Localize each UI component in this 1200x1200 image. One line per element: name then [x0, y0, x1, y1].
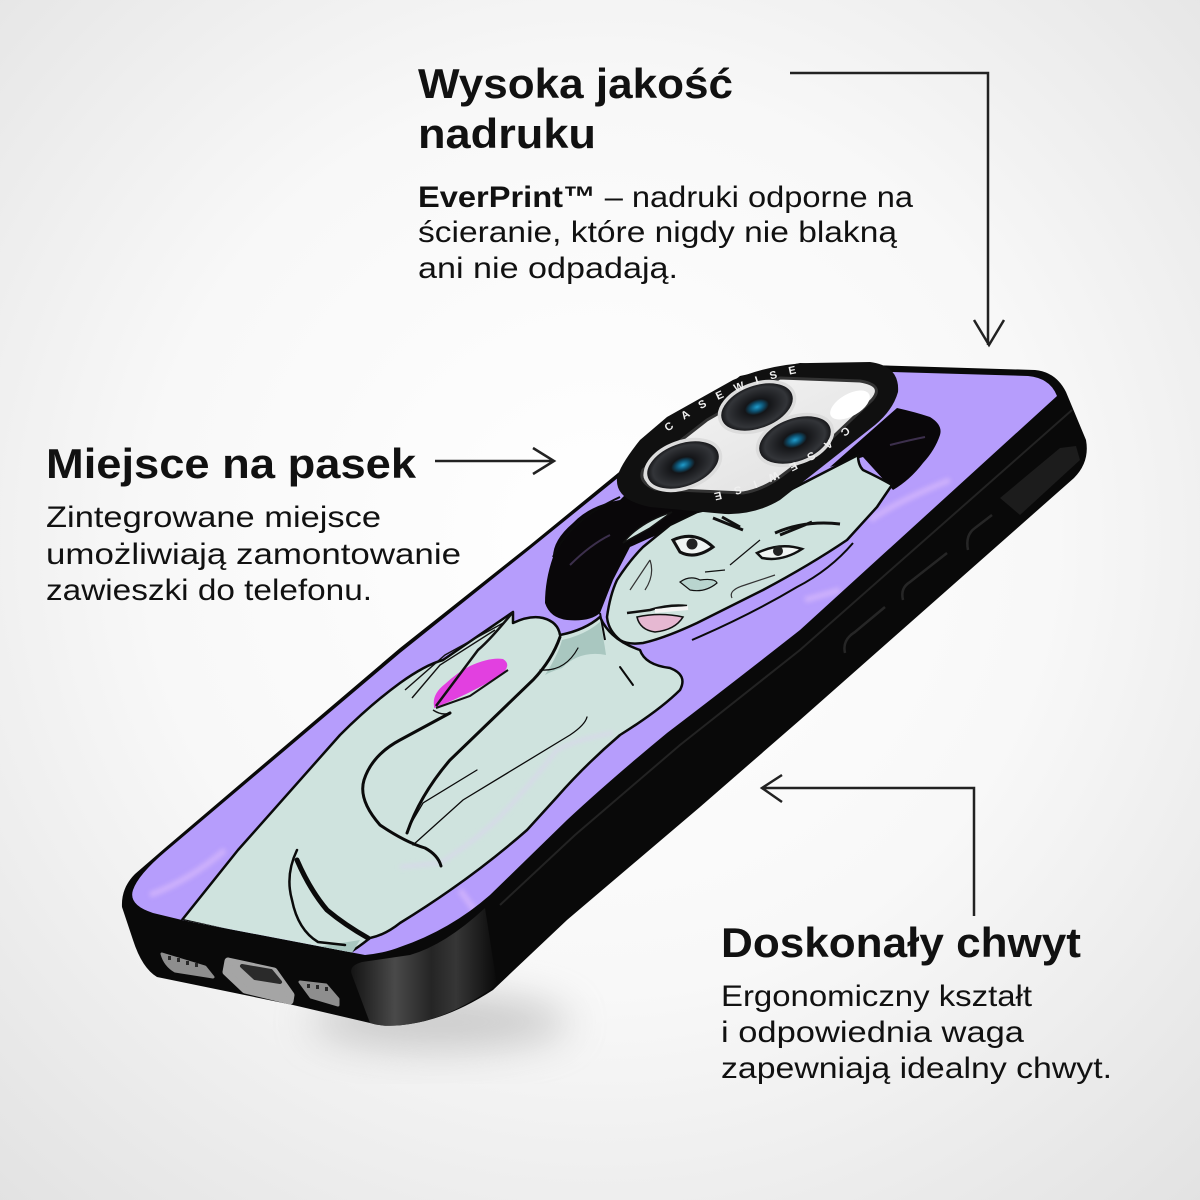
- phone drop shadow: [310, 994, 570, 1050]
- callout: strap slot: [46, 440, 461, 607]
- callout: grip: [721, 919, 1112, 1085]
- brand text on ring: [665, 366, 850, 500]
- ear: [623, 512, 672, 543]
- description: [721, 980, 1112, 1085]
- callout: print quality: [418, 60, 913, 285]
- camera opening: [642, 378, 876, 493]
- eyes: [673, 536, 802, 559]
- mouth: [627, 606, 688, 632]
- side buttons: [844, 515, 992, 653]
- heading: Doskonały chwyt: [721, 919, 1081, 966]
- hair highlights: [570, 437, 925, 565]
- description: [418, 181, 913, 285]
- description: zawieszki do telefonu.: [46, 574, 372, 607]
- neck shadow: [545, 622, 606, 675]
- hand fingers: [405, 612, 513, 714]
- arrow: grip: [762, 775, 974, 916]
- phone in black case: [122, 362, 1087, 1026]
- heading: nadruku: [418, 110, 596, 157]
- arrow: print quality: [790, 73, 1004, 345]
- camera ring: [617, 362, 898, 514]
- arrow: strap slot: [435, 448, 554, 474]
- description: EverPrint™ – nadruki odporne na: [418, 181, 913, 214]
- lenses: [712, 372, 802, 442]
- description: umożliwiają zamontowanie: [46, 538, 461, 571]
- glossy corner highlight: [351, 908, 497, 1026]
- side rim details: [500, 410, 1080, 905]
- highlight: [825, 384, 875, 426]
- figure body: [182, 612, 682, 955]
- hair: [545, 496, 696, 620]
- light streaks: [150, 480, 950, 915]
- arm and torso lines: [289, 637, 633, 945]
- heading: Wysoka jakość: [418, 60, 733, 107]
- description: ani nie odpadają.: [418, 252, 678, 285]
- heart on hand: [434, 659, 507, 708]
- case body: [122, 363, 1087, 1026]
- ports on bottom edge: [162, 954, 338, 1005]
- description: Zintegrowane miejsce: [46, 501, 381, 534]
- heading: [418, 60, 733, 157]
- face: [607, 455, 892, 644]
- description: i odpowiednia waga: [721, 1016, 1024, 1049]
- screen print: [132, 372, 1057, 955]
- eyebrows: [713, 517, 840, 535]
- description: ścieranie, które nigdy nie blakną: [418, 216, 897, 249]
- heading: Miejsce na pasek: [46, 440, 417, 487]
- purple print background: [132, 372, 1057, 955]
- brand text on ring: CASEWISE: [714, 428, 850, 500]
- brand text on ring: CASEWISE: [665, 366, 796, 430]
- body streaks: [400, 733, 613, 867]
- description: zapewniają idealny chwyt.: [721, 1052, 1112, 1085]
- cheek lines: [630, 560, 775, 598]
- nose: [680, 540, 760, 591]
- camera island: [616, 362, 898, 514]
- description: [46, 501, 461, 607]
- description: Ergonomiczny kształt: [721, 980, 1033, 1013]
- bottom shadow patch: [320, 940, 360, 952]
- hair strand lines: [553, 497, 853, 640]
